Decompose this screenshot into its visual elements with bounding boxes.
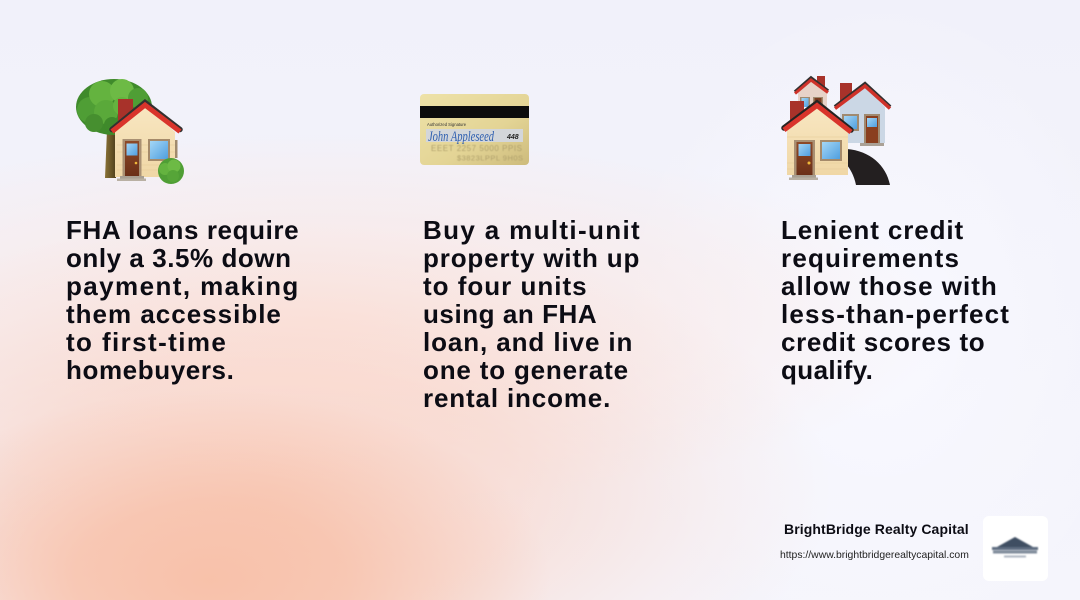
text: 3.5% down payment: them accessible [66, 299, 282, 329]
icon: house with tree [76, 79, 184, 184]
text: multi-unit property: Buy a multi-unit [423, 215, 641, 245]
text: lenient credit: credit scores to [781, 327, 985, 357]
icon: credit card back: EEET 2257 5000 PPIS [431, 144, 522, 153]
text: multi-unit property [423, 215, 641, 413]
text: lenient credit: allow those with [781, 271, 998, 301]
icon: credit card back: John Appleseed [428, 129, 495, 145]
text: multi-unit property: rental income. [423, 383, 611, 413]
text: 3.5% down payment [66, 215, 300, 385]
text: 3.5% down payment: only a 3.5% down [66, 243, 292, 273]
text: lenient credit: qualify. [781, 355, 873, 385]
text: lenient credit: requirements [781, 243, 960, 273]
text: lenient credit: Lenient credit [781, 215, 964, 245]
icon: credit card back: 448 [506, 134, 519, 141]
icon: credit card back: Authorized Signature [427, 122, 467, 127]
icon: group of houses [781, 76, 892, 185]
text: multi-unit property: loan, and live in [423, 327, 633, 357]
text: multi-unit property: to four units [423, 271, 588, 301]
text: lenient credit: less-than-perfect [781, 299, 1010, 329]
text: 3.5% down payment: homebuyers. [66, 355, 234, 385]
text: 3.5% down payment: to first-time [66, 327, 227, 357]
text: 3.5% down payment: payment, making [66, 271, 300, 301]
text: multi-unit property: using an FHA [423, 299, 597, 329]
icon: credit card back [420, 94, 529, 165]
brand name: BrightBridge Realty Capital [784, 521, 969, 537]
text: lenient credit [781, 215, 1010, 385]
logo tile [983, 516, 1048, 581]
text: multi-unit property: property with up [423, 243, 640, 273]
icon: credit card back: $3823LPPL 9H0S [457, 154, 523, 162]
website url: https://www.brightbridgerealtycapital.com [780, 550, 969, 561]
icon: logo mark [991, 536, 1039, 558]
text: multi-unit property: one to generate [423, 355, 629, 385]
text: 3.5% down payment: FHA loans require [66, 215, 299, 245]
